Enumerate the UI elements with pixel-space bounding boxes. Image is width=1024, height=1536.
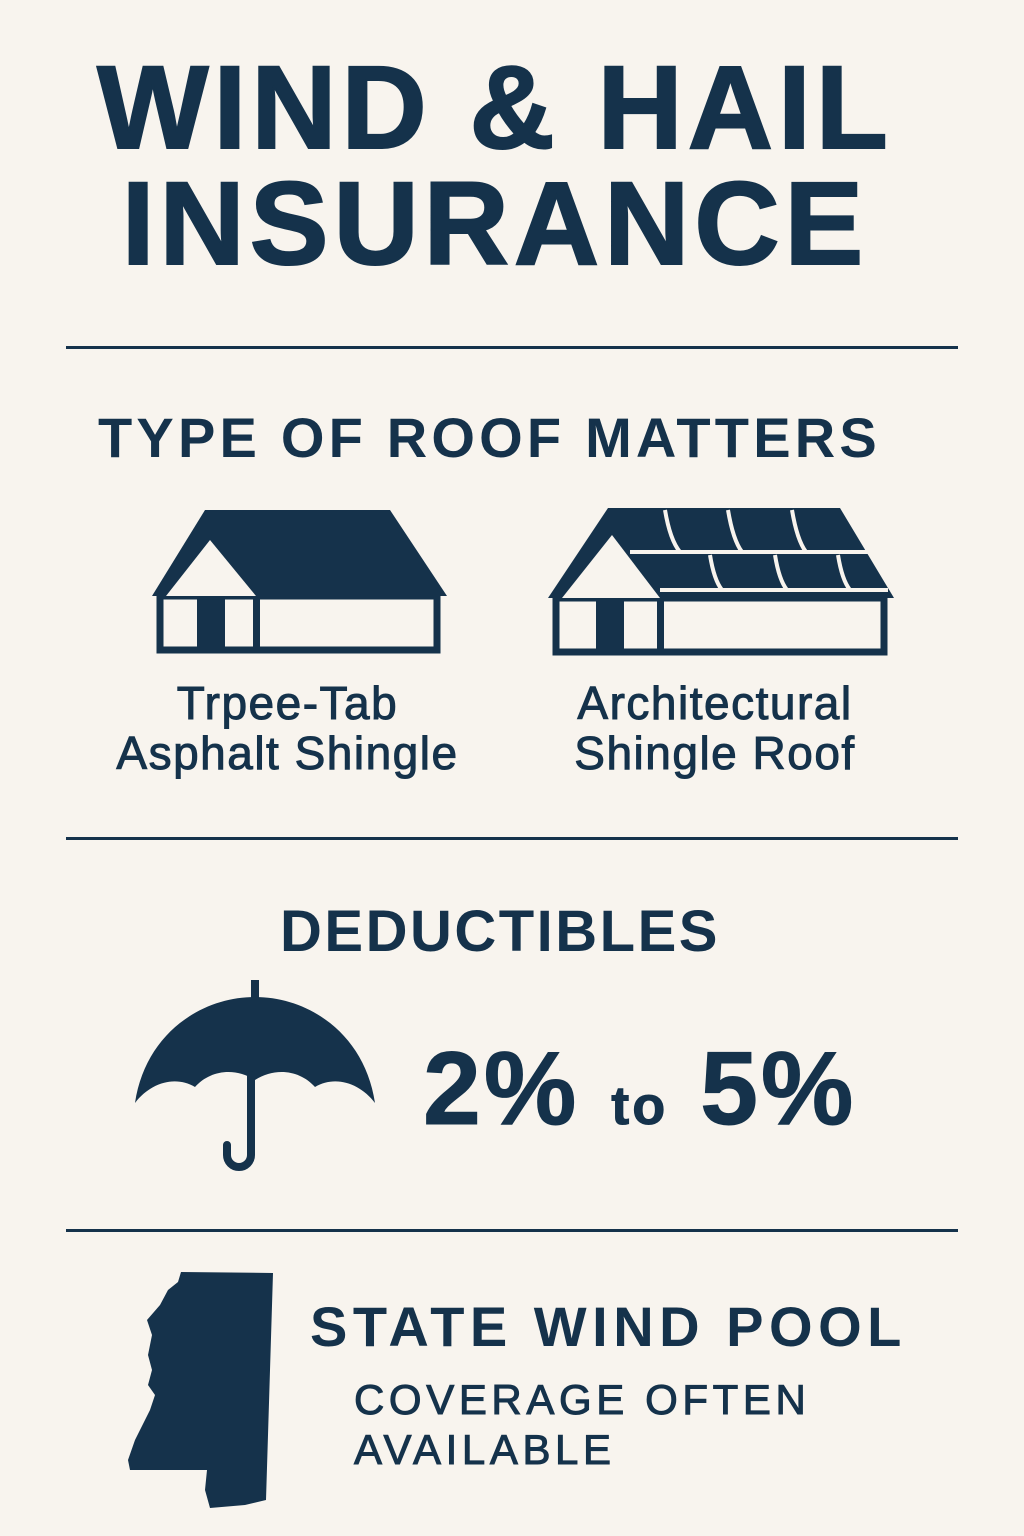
label: architectural: Architectural xyxy=(577,677,853,729)
text: coverage: AVAILABLE xyxy=(354,1426,616,1473)
label: three-tab: Asphalt Shingle xyxy=(116,727,459,779)
heading: roof: TYPE OF ROOF MATTERS xyxy=(98,406,881,469)
icon: architectural house xyxy=(548,508,894,656)
icon: umbrella xyxy=(135,980,375,1171)
heading: wind pool: STATE WIND POOL xyxy=(310,1295,907,1358)
icon: Mississippi xyxy=(128,1272,273,1508)
icon: three-tab house xyxy=(152,510,447,654)
label: three-tab: Trpee-Tab xyxy=(177,677,398,729)
deductible range: 2% to 5% xyxy=(423,1031,856,1147)
label: three-tab xyxy=(116,677,459,779)
text: coverage: COVERAGE OFTEN xyxy=(354,1376,810,1423)
title: WIND & HAIL xyxy=(97,42,893,174)
heading: deductibles: DEDUCTIBLES xyxy=(280,899,720,964)
title: INSURANCE xyxy=(122,158,868,290)
title xyxy=(96,42,893,290)
label: architectural xyxy=(574,677,856,779)
label: architectural: Shingle Roof xyxy=(574,727,856,779)
text: coverage xyxy=(353,1376,810,1473)
